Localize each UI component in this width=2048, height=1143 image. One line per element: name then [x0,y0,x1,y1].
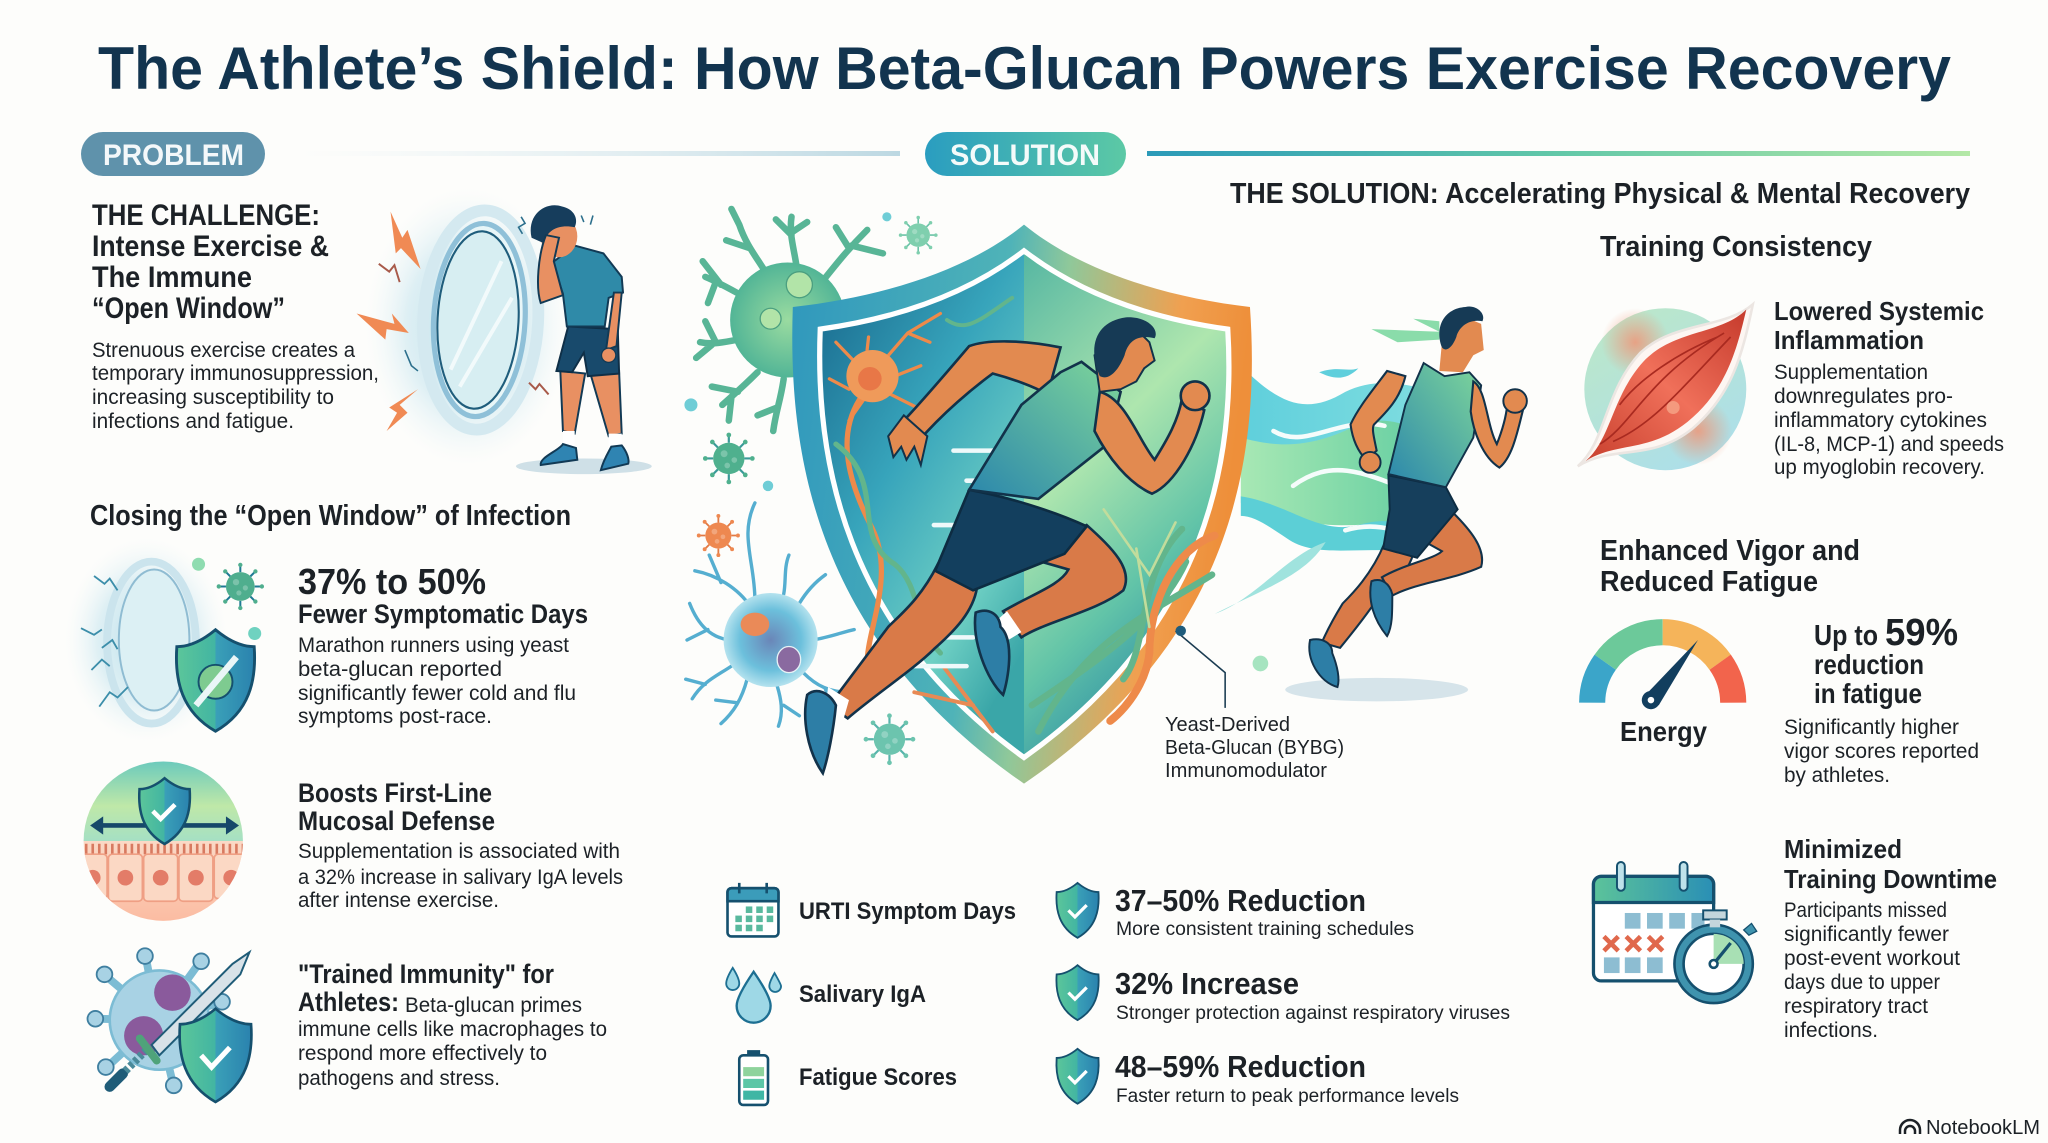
blue cell [686,503,854,726]
text: minimized training downtime: Training Downtime [1784,864,1997,894]
text: trained immunity: "Trained Immunity" for [298,959,554,989]
text: lowered systemic inflammation: Supplementation [1774,361,1928,384]
solution badge [925,132,1126,176]
text: lowered systemic inflammation: (IL-8, MCP-1) and speeds [1774,433,2004,456]
back arm [904,341,1061,441]
icon: calendar and stopwatch [1593,862,1757,1003]
challenge heading: “Open Window” [92,292,285,325]
result text: fatigue: 48–59% Reduction [1115,1049,1366,1084]
shorts [935,490,1087,590]
text: enhanced vigor heading: Reduced Fatigue [1600,566,1818,598]
challenge heading: Intense Exercise & [92,230,329,263]
row labels [799,898,1016,1091]
head [1095,329,1155,392]
text: minimized training downtime: Minimized [1784,834,1902,864]
text: mucosal defense: Supplementation is associated with [298,840,620,863]
text: lowered systemic inflammation: up myoglobin recovery. [1774,456,1985,479]
challenge body: increasing susceptibility to [92,386,334,409]
front arm [1095,392,1204,494]
problem badge: PROBLEM [103,139,244,172]
text: lowered systemic inflammation: Inflammation [1774,325,1924,355]
text: 59 percent reduction [1784,612,1979,787]
text: trained immunity: respond more effectively to [298,1042,547,1065]
text: 59 percent reduction: Up to [1814,620,1878,652]
text: mucosal defense: a 32% increase in salivary IgA levels [298,866,623,889]
athlete head [541,216,577,257]
challenge body: Strenuous exercise creates a [92,339,355,362]
text: minimized training downtime: days due to upper [1784,971,1940,994]
panel: the challenge text [92,199,379,433]
text: 59 percent reduction: Significantly higher [1784,716,1959,739]
text: lowered systemic inflammation: downregulates pro- [1774,385,1953,408]
text: minimized training downtime: infections. [1784,1019,1878,1042]
gauge: energy [1592,632,1733,747]
challenge heading: The Immune [92,261,252,294]
challenge heading: THE CHALLENGE: [92,199,320,232]
illustration: shield [792,225,1252,784]
callout: beta-glucan label: Immunomodulator [1165,760,1327,782]
challenge body: temporary immunosuppression, [92,362,379,385]
result text: iga: 32% Increase [1115,966,1299,1001]
result text: fatigue: Faster return to peak performance levels [1116,1086,1459,1107]
front leg [1003,525,1126,637]
text: 59 percent reduction: vigor scores reported [1784,740,1979,763]
tank top [969,362,1121,499]
text: 59 percent reduction: in fatigue [1814,678,1922,709]
text: minimized training downtime: post-event workout [1784,947,1960,970]
callout: beta-glucan label [1165,714,1344,782]
gauge: energy: Energy [1620,716,1707,747]
text: minimized training downtime: significantly fewer [1784,923,1949,946]
challenge body [92,339,379,433]
text: minimized training downtime: Participants missed [1784,899,1947,922]
callout: beta-glucan label: Beta-Glucan (BYBG) [1165,737,1344,759]
icon: muscle [1578,304,1753,470]
text: minimized training downtime [1784,834,1997,1042]
icon: macrophage, sword and shield [88,948,251,1102]
result shield icons [1056,883,1099,1104]
row icon: battery [739,1050,768,1105]
challenge body: infections and fatigue. [92,410,294,433]
icon: portal, shield and virus [65,538,264,742]
title: The Athlete’s Shield: How Beta-Glucan Powers Exercise Recovery [98,35,1952,102]
callout: beta-glucan label: Yeast-Derived [1165,714,1290,736]
solution heading: THE SOLUTION: Accelerating Physical & Mental Recovery [1230,178,1970,210]
callout leader [1176,631,1225,708]
text: enhanced vigor heading: Enhanced Vigor and [1600,535,1860,567]
row icon: water drops [726,968,781,1023]
text: stat 37 to 50 percent [298,561,588,728]
text: stat 37 to 50 percent: Marathon runners using yeast [298,634,569,657]
nerve cells and beta-glucan strands [829,298,1215,731]
text: lowered systemic inflammation: inflammatory cytokines [1774,409,1987,432]
text: 59 percent reduction: by athletes. [1784,764,1890,787]
illustration: immune cells and pathogens [684,209,1268,765]
back leg [829,564,977,718]
text: 59 percent reduction: reduction [1814,649,1924,680]
result text: urti: More consistent training schedules [1116,919,1414,940]
heading: closing the open window: Closing the “Open Window” of Infection [90,500,571,532]
challenge heading [92,199,329,325]
text: stat 37 to 50 percent: 37% to 50% [298,561,486,602]
row icon: calendar [728,883,778,936]
result text: urti: 37–50% Reduction [1115,883,1366,918]
icon: mucosal defense [76,761,248,921]
text: mucosal defense: Boosts First-Line [298,778,492,808]
brand: notebooklm: NotebookLM [1926,1117,2040,1139]
row labels: Salivary IgA [799,981,926,1008]
text: trained immunity: immune cells like macrophages to [298,1018,607,1041]
socks and shoes [995,611,1021,640]
text: trained immunity [298,959,607,1090]
text: mucosal defense: Mucosal Defense [298,806,495,836]
text: stat 37 to 50 percent: beta-glucan reported [298,658,502,681]
green cell [696,209,883,431]
text: training consistency: Training Consistency [1600,231,1872,263]
text: lowered systemic inflammation: Lowered Systemic [1774,296,1984,326]
illustration: second runner [1285,306,1527,701]
result text: fatigue [1115,1049,1459,1107]
text: stat 37 to 50 percent: symptoms post-race. [298,705,492,728]
result text: urti [1115,883,1414,940]
text: trained immunity: Beta-glucan primes [405,994,582,1017]
illustration: energy wave flow [1215,319,1439,614]
row labels: URTI Symptom Days [799,898,1016,925]
athlete shorts [556,327,619,376]
text: enhanced vigor heading [1600,535,1860,598]
athlete legs and shoes [560,371,622,436]
text: 59 percent reduction: 59% [1885,612,1958,654]
text: mucosal defense: after intense exercise. [298,889,499,912]
text: lowered systemic inflammation [1774,296,2004,479]
text: minimized training downtime: respiratory tract [1784,995,1928,1018]
text: trained immunity: Athletes: [298,987,399,1017]
text: mucosal defense [298,778,623,912]
athlete shirt [552,246,623,327]
text: stat 37 to 50 percent: significantly fewer cold and flu [298,682,576,705]
row labels: Fatigue Scores [799,1064,957,1091]
text: stat 37 to 50 percent: Fewer Symptomatic Days [298,599,588,629]
result text: iga: Stronger protection against respiratory viruses [1116,1003,1510,1024]
result text: iga [1115,966,1510,1024]
solution badge: SOLUTION [950,139,1100,172]
problem badge [81,132,265,176]
text: trained immunity: pathogens and stress. [298,1067,500,1090]
illustration: open window portal and fatigued athlete [357,188,652,474]
